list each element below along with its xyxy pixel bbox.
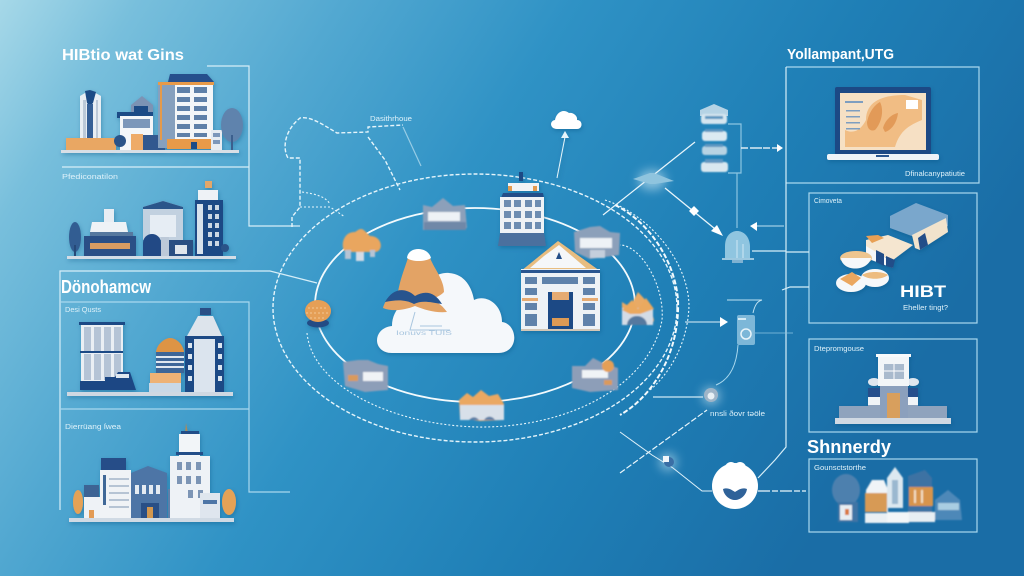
- panel: materials: [782, 193, 977, 323]
- diagram: ring network: [273, 174, 689, 442]
- illustration: city block one: [61, 74, 243, 153]
- caption: box three: Desi Qusts: [65, 307, 102, 314]
- heading: lower right: Shnnerdy: [807, 437, 891, 457]
- heading: top right: Yollampant,UTG: [787, 46, 894, 63]
- panel: landmark: [809, 339, 977, 432]
- icon: orange mountain figure: Ionuvs TUIS: [396, 331, 452, 337]
- icon: small cloud with arrow: [551, 111, 582, 178]
- icon: small node: [659, 453, 677, 471]
- node: orange cluster left: [343, 229, 381, 261]
- icon: server stack: [700, 104, 728, 172]
- caption: box four: Dierrüang ſwea: [65, 424, 121, 431]
- illustration: city block two: [67, 181, 236, 259]
- node: gray cluster upper right: [574, 226, 620, 259]
- connector: device links: [620, 300, 806, 491]
- caption: materials: Cimoveta: [814, 198, 842, 205]
- icon: bell: [722, 231, 754, 263]
- arrow: panel to bell: [750, 222, 784, 231]
- illustration: city block three: [67, 308, 233, 396]
- label: upper route: Dasithrhoue: [370, 116, 412, 123]
- icon: top tower: [498, 172, 546, 246]
- caption: laptop: Dfinalcanypatiutie: [905, 171, 965, 178]
- heading: lower left: Dönohamcw: [61, 277, 152, 297]
- illustration: district buildings: [832, 467, 962, 523]
- icon: large house building: [521, 241, 600, 331]
- text: HIBT: HIBT: [900, 282, 947, 301]
- node: gray cluster lower left: [343, 360, 388, 392]
- label: device note: nnsli ðovr tǝöle: [710, 410, 765, 418]
- icon: device: [737, 315, 755, 345]
- caption: top left second: Pfediconatilon: [62, 174, 118, 181]
- node: orange cluster bottom: [459, 390, 504, 421]
- caption: district: Gounsctstorthe: [814, 465, 866, 472]
- caption: HIBT: Eheller tingt?: [903, 305, 948, 312]
- icon: stacked material blocks: [836, 203, 948, 292]
- connector: satellite lines: [603, 142, 723, 236]
- illustration: city block four: [69, 423, 236, 522]
- icon: camera node: [702, 387, 720, 405]
- icon: center cloud: [377, 273, 514, 353]
- icon: orange mountain figure: [383, 249, 452, 337]
- illustration: landmark building: [835, 354, 951, 424]
- panel: district: [809, 459, 977, 532]
- panel: top left frame: [62, 66, 300, 226]
- connector: server bracket: [728, 124, 741, 228]
- node: gray cluster top: [423, 198, 467, 230]
- panel: right top frame: [752, 67, 979, 478]
- heading: top left: HIBtio wat Gins: [62, 47, 184, 64]
- connector: dashed route upper left: [285, 118, 421, 227]
- icon: white circle hub: [712, 462, 758, 509]
- node: orange box right: [622, 292, 654, 325]
- caption: landmark: Dtepromgouse: [814, 346, 864, 353]
- panel: lower left frame: [60, 271, 317, 510]
- icon: satellite: [633, 170, 674, 190]
- node: orange sphere: [305, 300, 331, 328]
- icon: laptop: [827, 87, 939, 160]
- node: gray cluster lower right: [572, 358, 618, 392]
- arrow: server to panel: [741, 144, 783, 152]
